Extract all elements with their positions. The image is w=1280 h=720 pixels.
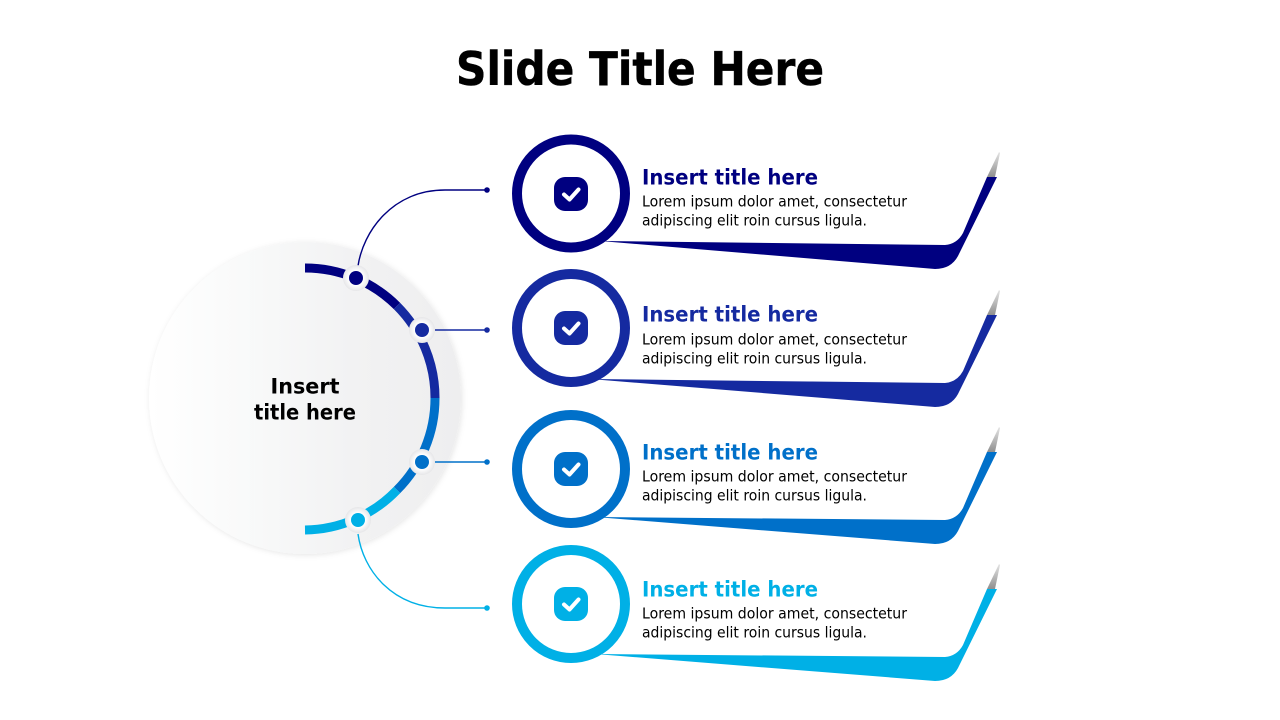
ribbon	[590, 315, 997, 407]
icon: check badge	[554, 587, 588, 621]
heading: Insert title here	[642, 578, 818, 602]
body text: Lorem ipsum dolor amet, consectetur	[642, 604, 908, 622]
ribbon	[595, 452, 997, 544]
body text: Lorem ipsum dolor amet, consectetur	[642, 192, 908, 210]
connector 4	[345, 507, 490, 611]
panel: central circle	[149, 242, 461, 554]
heading: Insert title here	[642, 440, 818, 464]
icon: check badge	[554, 452, 588, 486]
connector 3	[409, 449, 490, 475]
panel: item 2: adipiscing elit roin cursus ligula.	[642, 350, 867, 368]
panel: item 1	[517, 140, 1000, 269]
icon: check badge	[554, 177, 588, 211]
panel: item 2	[517, 274, 1000, 407]
connector 1	[343, 187, 490, 291]
ribbon highlight	[987, 564, 1000, 589]
ribbon	[600, 177, 997, 269]
ring	[517, 550, 625, 658]
heading: Insert title here	[642, 302, 818, 326]
segmented arc	[305, 268, 435, 530]
panel: item 3	[517, 415, 1000, 544]
body text: Lorem ipsum dolor amet, consectetur	[642, 468, 908, 486]
panel: central circle: title here	[254, 400, 356, 424]
heading: Insert title here	[642, 166, 818, 190]
panel: item 4: adipiscing elit roin cursus ligula.	[642, 624, 867, 642]
ring	[517, 140, 625, 248]
icon: check badge	[554, 311, 588, 345]
ribbon	[595, 589, 997, 681]
body text: Lorem ipsum dolor amet, consectetur	[642, 330, 908, 348]
central disc	[149, 242, 461, 554]
panel: item 4	[517, 550, 1000, 681]
ring	[517, 415, 625, 523]
ribbon highlight	[987, 427, 1000, 452]
ring	[517, 274, 625, 382]
panel: item 1: adipiscing elit roin cursus ligula.	[642, 212, 867, 230]
ribbon highlight	[987, 152, 1000, 177]
connector 2	[409, 317, 490, 343]
ribbon highlight	[987, 290, 1000, 315]
panel: item 3: adipiscing elit roin cursus ligula.	[642, 486, 867, 504]
title: Slide Title Here	[456, 42, 824, 96]
center label: Insert	[270, 374, 340, 398]
